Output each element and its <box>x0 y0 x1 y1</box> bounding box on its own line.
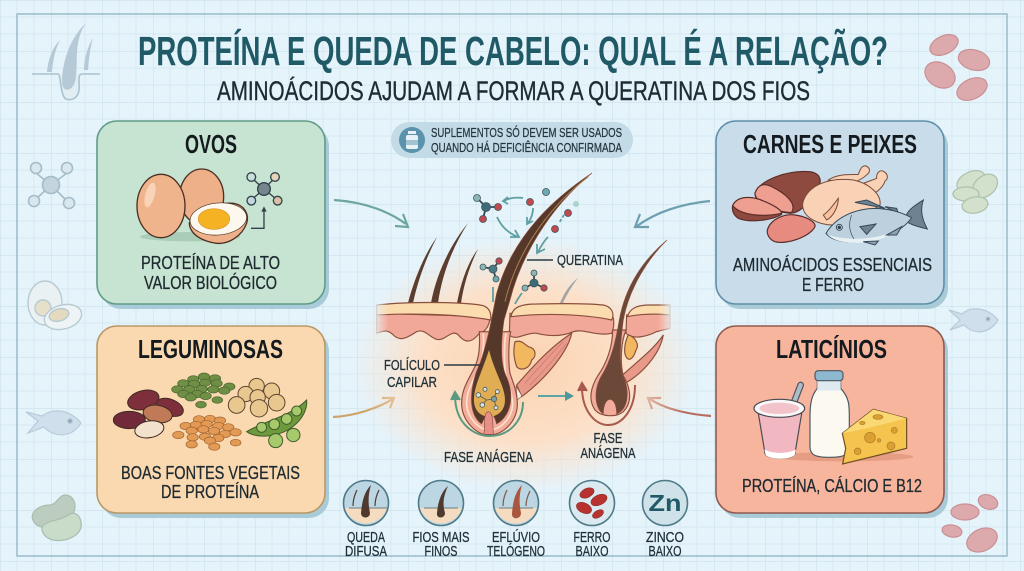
label: fase anágena right <box>580 430 636 462</box>
label: BAIXO <box>576 543 608 560</box>
text: ovos <box>141 252 280 293</box>
arrow: growth cycle main <box>451 392 523 436</box>
label: ZINCO <box>646 529 684 546</box>
main follicle <box>462 173 592 435</box>
decorative icon: beans left <box>32 495 81 541</box>
icon: supplement bottle <box>399 127 425 153</box>
text: carnes e peixes: E FERRO <box>802 274 864 295</box>
heading: ovos: OVOS <box>185 129 237 159</box>
text: leguminosas: BOAS FONTES VEGETAIS <box>121 462 300 483</box>
arrow: ovos to follicle <box>334 200 408 227</box>
arrow: anagen to anagen <box>538 391 574 401</box>
symptom: zinco baixo <box>642 480 688 560</box>
label: folículo capilar <box>384 357 482 391</box>
label: fase anágena main: FASE ANÁGENA <box>444 449 533 466</box>
text: leguminosas <box>121 462 300 502</box>
decorative icon: egg <box>28 281 84 334</box>
arrow: laticínios to follicle <box>648 398 711 416</box>
callout text: SUPLEMENTOS SÓ DEVEM SER USADOS <box>431 125 622 140</box>
right follicle <box>591 240 667 416</box>
heading: laticínios: LATICÍNIOS <box>776 334 887 364</box>
arrow: leguminosas to follicle <box>333 398 394 417</box>
label: fase anágena right: FASE <box>594 430 622 447</box>
text: ovos: VALOR BIOLÓGICO <box>144 272 277 293</box>
label <box>412 529 470 560</box>
label: DIFUSA <box>345 543 387 560</box>
label: folículo capilar: FOLÍCULO <box>384 357 440 374</box>
callout text <box>431 125 622 155</box>
symptom: eflúvio telógeno <box>487 480 545 560</box>
molecules in bulb <box>476 387 499 410</box>
label: EFLÚVIO <box>492 529 540 546</box>
small hairs <box>408 223 578 303</box>
label <box>574 529 610 560</box>
symptom: queda difusa <box>344 480 388 560</box>
heading: leguminosas: LEGUMINOSAS <box>138 334 283 364</box>
decorative icon: red cells bottom right <box>941 492 1001 557</box>
text: leguminosas: DE PROTEÍNA <box>161 481 260 502</box>
text: ovos: PROTEÍNA DE ALTO <box>141 252 280 273</box>
callout: supplements <box>391 122 633 158</box>
symptom: ferro baixo <box>570 480 614 560</box>
icon: legumes <box>113 373 307 450</box>
decorative icon: hair follicle <box>32 23 100 100</box>
panel: leguminosas <box>97 326 329 518</box>
heading: carnes e peixes: CARNES E PEIXES <box>743 129 917 159</box>
icon: molecule with arrow <box>247 173 282 228</box>
label: fase anágena right: ANÁGENA <box>580 445 636 462</box>
label: FIOS MAIS <box>412 529 470 546</box>
icon: meat, chicken and fish <box>732 166 927 245</box>
label: folículo capilar: CAPILAR <box>387 374 437 391</box>
text: carnes e peixes: AMINOÁCIDOS ESSENCIAIS <box>733 254 932 275</box>
decorative icon: red cells top right <box>920 31 992 105</box>
arrow: carnes to follicle <box>635 201 710 227</box>
text: laticínios: PROTEÍNA, CÁLCIO E B12 <box>742 475 922 496</box>
panel: laticínios <box>716 326 948 518</box>
label <box>345 529 387 560</box>
callout text: QUANDO HÁ DEFICIÊNCIA CONFIRMADA <box>431 140 622 155</box>
sebaceous gland and muscle, main follicle <box>514 333 572 400</box>
icon: eggs <box>137 169 248 243</box>
arrow: growth cycle right <box>578 383 635 425</box>
label <box>487 529 545 560</box>
label: QUEDA <box>347 529 385 546</box>
label: TELÓGENO <box>487 543 545 560</box>
panel: ovos <box>97 121 329 309</box>
panel: carnes e peixes <box>716 121 948 309</box>
subtitle: AMINOÁCIDOS AJUDAM A FORMAR A QUERATINA DOS FIOS <box>217 76 810 106</box>
label: FERRO <box>574 529 610 546</box>
decorative icon: fish right <box>949 309 998 332</box>
decorative icon: fish left <box>26 411 81 435</box>
label: queratina: QUERATINA <box>557 252 623 269</box>
molecules and keratin flow <box>474 188 579 304</box>
decorative icon: beans right <box>953 167 1002 215</box>
label: BAIXO <box>648 543 682 560</box>
label: queratina <box>527 252 623 269</box>
symptom: zinco baixo: Zn <box>648 490 682 516</box>
skin layers <box>377 173 670 435</box>
chart: hair follicle diagram <box>353 173 697 493</box>
text: carnes e peixes <box>733 254 932 295</box>
icon: yogurt, milk and cheese <box>754 371 913 464</box>
label: FINOS <box>424 543 458 560</box>
decorative icon: molecule <box>28 162 74 208</box>
label <box>646 529 684 560</box>
symptom: fios mais finos <box>412 480 470 560</box>
